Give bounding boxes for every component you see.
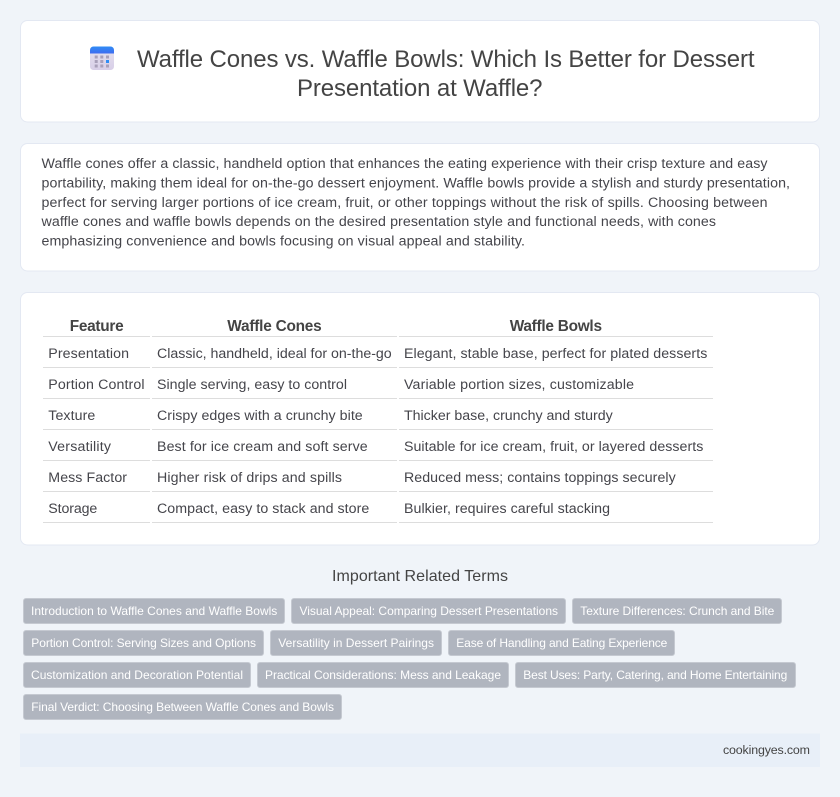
tag: practical considerations	[258, 662, 508, 688]
table row: Mess Factor: Higher risk of drips and spills	[157, 470, 342, 486]
table row: Texture	[43, 408, 713, 430]
table row: Storage: Bulkier, requires careful stacking	[404, 501, 610, 517]
tag: versatility: Versatility in Dessert Pairings	[278, 636, 434, 650]
tag: introduction: Introduction to Waffle Cones and Waffle Bowls	[31, 604, 277, 618]
table row: Presentation: Presentation	[48, 346, 129, 362]
panel: introduction text	[20, 144, 820, 271]
tag: best uses: Best Uses: Party, Catering, and Home Entertaining	[523, 668, 787, 682]
table row: Texture: Crispy edges with a crunchy bite	[157, 408, 363, 424]
tag: portion control	[24, 630, 264, 656]
table row: Storage: Compact, easy to stack and store	[157, 501, 369, 517]
tag: ease of handling	[448, 630, 674, 656]
tag: visual appeal: Visual Appeal: Comparing Dessert Presentations	[300, 604, 558, 618]
table row: Mess Factor	[43, 470, 713, 492]
table row: Versatility: Best for ice cream and soft serve	[157, 439, 368, 455]
text block: description	[40, 156, 790, 250]
table header row: Waffle Bowls	[510, 318, 602, 335]
tag: final verdict: Final Verdict: Choosing Between Waffle Cones and Bowls	[31, 700, 334, 714]
tag: final verdict	[24, 694, 342, 720]
tag: visual appeal	[292, 598, 566, 624]
table row: Storage	[43, 501, 713, 523]
table row: Mess Factor: Reduced mess; contains toppings securely	[404, 470, 677, 486]
tag: introduction	[24, 598, 284, 624]
text block: description: Waffle cones offer a classic, handheld option that enhances the eating experience with their crisp texture and easy	[42, 156, 768, 172]
table header row	[43, 318, 713, 337]
table row: Versatility: Versatility	[48, 439, 112, 455]
table row: Versatility	[43, 439, 713, 461]
table row: Storage: Storage	[48, 501, 97, 517]
tag: customization	[24, 662, 250, 688]
table row: Versatility: Suitable for ice cream, fruit, or layered desserts	[404, 439, 703, 455]
panel: comparison table	[20, 292, 820, 545]
text block: description: emphasizing convenience and bowls focusing on visual appeal and stability.	[42, 234, 525, 250]
tag: customization: Customization and Decoration Potential	[31, 668, 243, 682]
title: Presentation at Waffle?	[297, 75, 542, 102]
tag: texture	[572, 598, 782, 624]
tag: ease of handling: Ease of Handling and Eating Experience	[456, 636, 668, 650]
tag: portion control: Portion Control: Serving Sizes and Options	[31, 636, 256, 650]
text block: description: waffle cones and waffle bowls depends on the desired presentation style and functional needs, with cones	[40, 214, 716, 230]
title: Waffle Cones vs. Waffle Bowls: Which Is Better for Dessert	[137, 46, 755, 73]
text block: description: perfect for serving larger portions of ice cream, fruit, or other toppings without the risk of spills. Choosing between	[42, 195, 768, 211]
table row: Portion Control: Single serving, easy to control	[157, 377, 347, 393]
table row: Texture: Texture	[48, 408, 95, 424]
table row: Mess Factor: Mess Factor	[48, 470, 127, 486]
tag: versatility	[270, 630, 442, 656]
table header row: Waffle Cones	[227, 318, 322, 335]
table row: Presentation: Classic, handheld, ideal for on-the-go	[157, 346, 392, 362]
footer	[20, 734, 820, 767]
table header row: Feature	[70, 318, 124, 335]
text block: description: portability, making them ideal for on-the-go dessert enjoyment. Waffle bowls provide a stylish and sturdy presentation,	[42, 176, 790, 192]
table row: Presentation: Elegant, stable base, perfect for plated desserts	[404, 346, 707, 362]
table row: Portion Control: Variable portion sizes, customizable	[404, 377, 634, 393]
table row: Portion Control: Portion Control	[48, 377, 144, 393]
table row: Portion Control	[43, 377, 713, 399]
footer site name: cookingyes.com	[723, 743, 810, 757]
tag: texture: Texture Differences: Crunch and Bite	[580, 604, 775, 618]
header panel	[20, 20, 820, 122]
title	[137, 46, 755, 102]
tag: practical considerations: Practical Considerations: Mess and Leakage	[265, 668, 501, 682]
table row: Presentation	[43, 346, 713, 368]
table row: Texture: Thicker base, crunchy and sturdy	[404, 408, 614, 424]
tag: best uses	[516, 662, 796, 688]
icon: calendar	[90, 46, 114, 70]
heading: important related terms: Important Related Terms	[332, 568, 508, 585]
related term tags	[24, 598, 796, 720]
